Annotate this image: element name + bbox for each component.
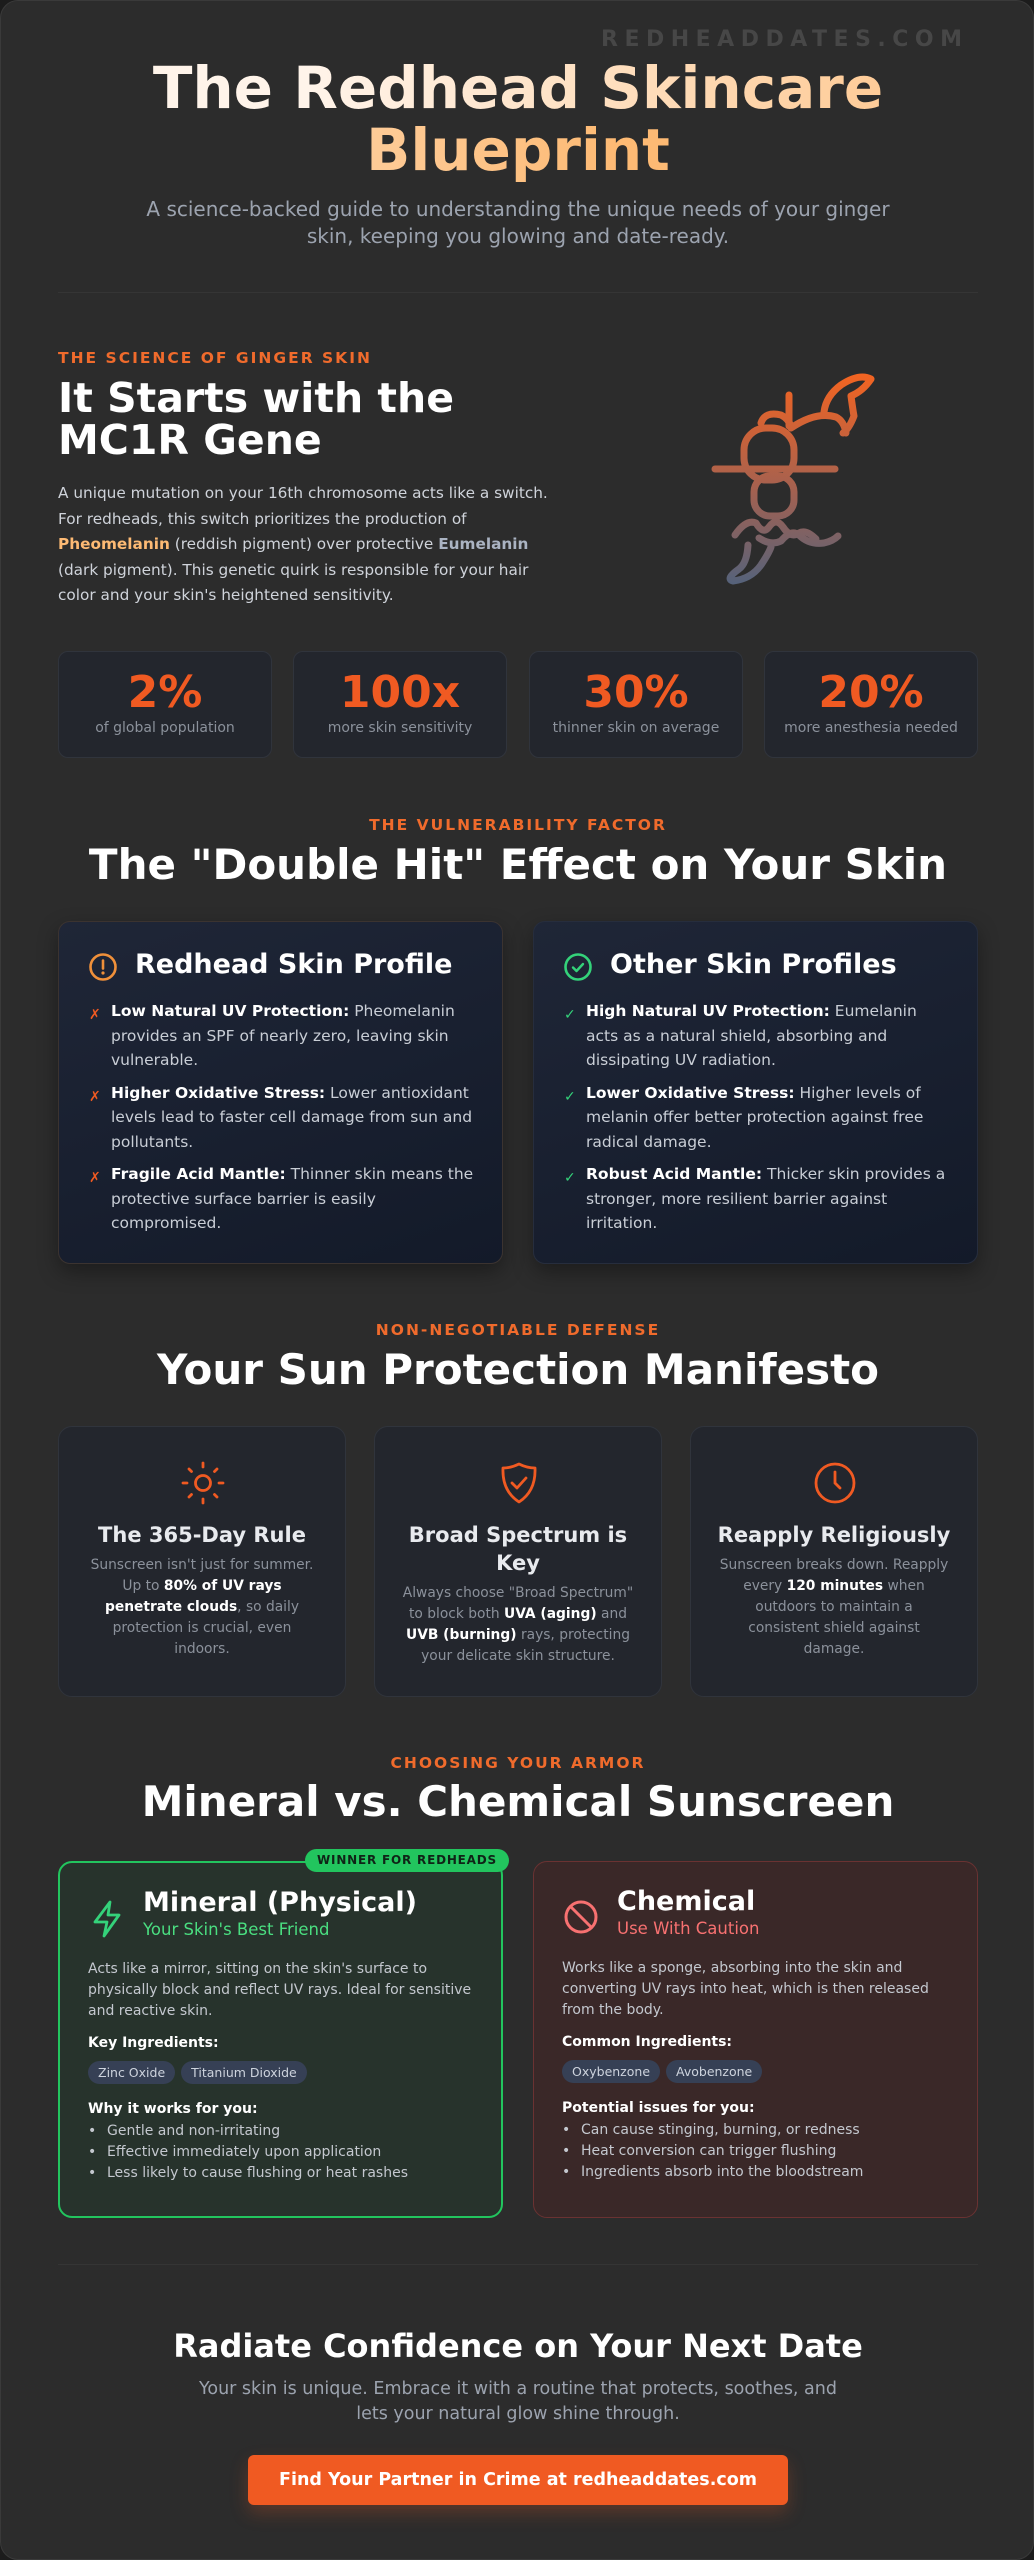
stat: 100x <box>293 651 507 758</box>
panel: mineral: Mineral (Physical) <box>143 1887 417 1918</box>
panel: chemical: Chemical <box>617 1886 755 1917</box>
paragraph: A unique mutation on your 16th chromosome acts like a switch. For redheads, this switch prioritizes the production of Pheomelanin (reddish pigment) over protective Eumelanin (dark pigment). This genetic quirk is responsible for your hair color and your skin's heightened sensitivity. <box>58 484 548 604</box>
heading: double hit: The "Double Hit" Effect on Your Skin <box>89 840 947 889</box>
CTA button <box>248 2455 788 2505</box>
panel: chemical: Oxybenzone <box>572 2064 650 2079</box>
badge: winner <box>305 1849 509 1872</box>
stat: 30%: thinner skin on average <box>553 720 719 736</box>
CTA heading: Radiate Confidence on Your Next Date <box>173 2327 863 2365</box>
CTA button: Find Your Partner in Crime at redheaddates.com <box>279 2470 757 2490</box>
stat: 2% <box>58 651 272 758</box>
panel: redhead profile: Low Natural UV Protection: Pheomelanin provides an SPF of nearly zero, leaving skin vulnerable. <box>111 1002 455 1069</box>
stat: 20%: more anesthesia needed <box>784 720 958 736</box>
panel: redhead profile: Redhead Skin Profile <box>135 949 452 980</box>
card: reapply: Sunscreen breaks down. Reapply <box>720 1557 948 1573</box>
panel: chemical <box>533 1861 978 2218</box>
card: 365-day rule <box>58 1426 346 1697</box>
panel: chemical: Potential issues for you: <box>562 2100 755 2116</box>
panel: chemical: Can cause stinging, burning, or redness <box>581 2122 860 2138</box>
panel: redhead profile: ✗ <box>89 1170 101 1186</box>
badge: winner: WINNER FOR REDHEADS <box>317 1853 497 1867</box>
panel: redhead profile: ✗ <box>89 1007 101 1023</box>
card: reapply: damage. <box>804 1641 864 1657</box>
icon: clock <box>814 1462 856 1504</box>
stat: 100x: more skin sensitivity <box>328 720 472 736</box>
panel: mineral: Your Skin's Best Friend <box>143 1920 329 1939</box>
panel: other profiles: ✓ <box>564 1007 576 1023</box>
eyebrow: vulnerability: THE VULNERABILITY FACTOR <box>369 816 667 834</box>
heading <box>58 374 454 464</box>
panel: other profiles: ✓ <box>564 1088 576 1104</box>
subtitle: A science-backed guide to understanding the unique needs of your ginger skin, keeping you glowing and date-ready. <box>146 197 890 248</box>
panel: other profiles: Robust Acid Mantle: Thicker skin provides a stronger, more resilient barrier against irritation. <box>586 1165 945 1232</box>
heading: manifesto: Your Sun Protection Manifesto <box>157 1345 879 1394</box>
panel: mineral: Gentle and non-irritating <box>107 2123 280 2139</box>
panel: redhead profile: Fragile Acid Mantle: Thinner skin means the protective surface barrier is easily compromised. <box>111 1165 473 1232</box>
card: broad spectrum <box>374 1426 662 1697</box>
icon: check circle <box>564 953 592 981</box>
heading: It Starts with the <box>58 374 454 422</box>
panel: mineral: Effective immediately upon application <box>107 2144 381 2160</box>
card: reapply: outdoors to maintain a <box>755 1599 913 1615</box>
panel: chemical: Common Ingredients: <box>562 2034 732 2050</box>
panel: other profiles: ✓ <box>564 1170 576 1186</box>
stat: 20%: 20% <box>818 667 924 718</box>
panel: redhead profile: ✗ <box>89 1088 101 1104</box>
panel: other profiles: High Natural UV Protection: Eumelanin acts as a natural shield, absorbing and dissipating UV radiation. <box>586 1002 917 1069</box>
card: reapply: consistent shield against <box>748 1620 920 1636</box>
panel: redhead profile: Higher Oxidative Stress: Lower antioxidant levels lead to faster cell damage from sun and pollutants. <box>111 1084 472 1150</box>
panel: mineral: Acts like a mirror, sitting on the skin's surface to physically block and reflect UV rays. Ideal for sensitive and reactive skin. <box>88 1961 471 2019</box>
panel: mineral: Titanium Dioxide <box>191 2065 297 2080</box>
panel: mineral: Zinc Oxide <box>98 2065 165 2080</box>
panel: mineral: Why it works for you: <box>88 2101 258 2117</box>
card: 365-day rule: Sunscreen isn't just for summer. Up to 80% of UV rays penetrate clouds, so daily protection is crucial, even indoors. <box>91 1557 313 1657</box>
title <box>153 54 883 184</box>
stat: 2%: 2% <box>128 667 202 718</box>
panel: chemical: Avobenzone <box>676 2064 752 2079</box>
icon: alert <box>89 953 117 981</box>
title: The Redhead Skincare <box>153 54 883 122</box>
card: 365-day rule: The 365-Day Rule <box>98 1523 306 1547</box>
panel: chemical: Use With Caution <box>617 1919 759 1938</box>
icon: bolt <box>94 1900 120 1938</box>
eyebrow: THE SCIENCE OF GINGER SKIN <box>58 349 372 367</box>
panel: other profiles: Lower Oxidative Stress: Higher levels of melanin offer better protection against free radical damage. <box>586 1084 923 1150</box>
panel: other profiles: Other Skin Profiles <box>610 949 897 980</box>
stat: 30%: 30% <box>583 667 689 718</box>
stat: 30% <box>529 651 743 758</box>
watermark: REDHEADDATES.COM <box>601 27 969 52</box>
icon: gene figure <box>712 374 874 584</box>
card: broad spectrum: Always choose "Broad Spectrum" to block both UVA (aging) and UVB (burning) rays, protecting your delicate skin structure. <box>403 1585 633 1664</box>
panel: mineral: Key Ingredients: <box>88 2035 219 2051</box>
stat: 20% <box>764 651 978 758</box>
eyebrow: defense: NON-NEGOTIABLE DEFENSE <box>376 1321 660 1339</box>
icon: sun <box>182 1462 224 1504</box>
card: reapply: every 120 minutes when <box>743 1578 925 1594</box>
icon: shield <box>502 1462 536 1504</box>
panel: redhead profile <box>58 921 503 1264</box>
panel: mineral: Less likely to cause flushing or heat rashes <box>107 2165 408 2181</box>
panel: other profiles <box>533 921 978 1264</box>
card: reapply <box>690 1426 978 1697</box>
heading: MC1R Gene <box>58 416 322 464</box>
card: reapply: Reapply Religiously <box>718 1523 950 1547</box>
card: broad spectrum: Broad Spectrum is Key <box>409 1523 627 1575</box>
section: MC1R gene <box>58 349 548 604</box>
heading: mineral vs chemical: Mineral vs. Chemical Sunscreen <box>142 1777 894 1826</box>
title: Blueprint <box>366 116 670 184</box>
panel: chemical: Works like a sponge, absorbing into the skin and converting UV rays into heat, which is then released from the body. <box>562 1960 929 2018</box>
CTA text: Your skin is unique. Embrace it with a routine that protects, soothes, and lets your natural glow shine through. <box>199 2379 837 2424</box>
icon: prohibited <box>564 1900 598 1934</box>
eyebrow: armor: CHOOSING YOUR ARMOR <box>391 1754 645 1772</box>
stat: 100x: 100x <box>340 667 460 718</box>
panel: chemical: Heat conversion can trigger flushing <box>581 2143 836 2159</box>
stat: 2%: of global population <box>95 720 235 736</box>
panel: mineral <box>58 1861 503 2218</box>
panel: chemical: Ingredients absorb into the bloodstream <box>581 2164 863 2180</box>
